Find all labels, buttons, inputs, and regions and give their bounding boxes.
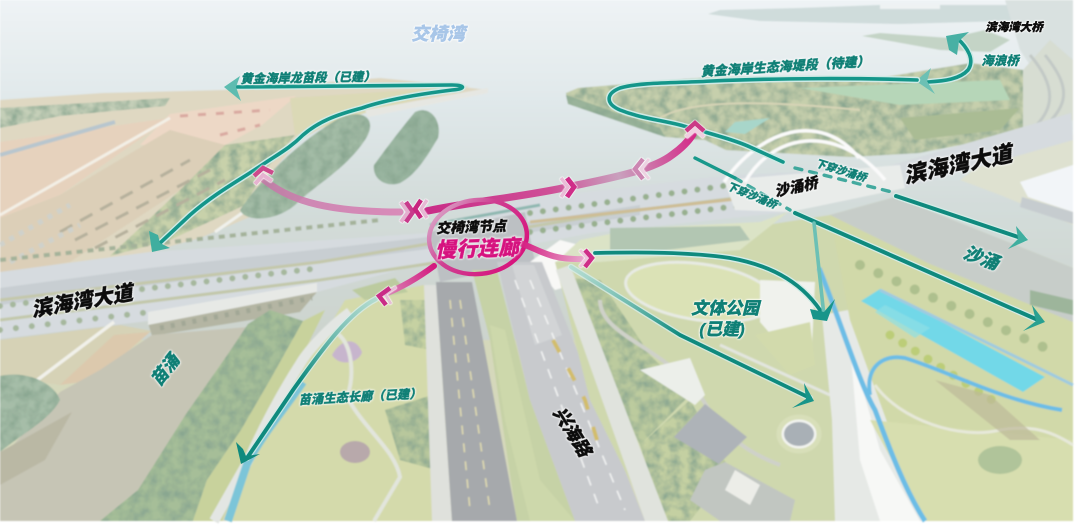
wide white road [822,310,925,521]
oval park [622,254,778,330]
teal arrow: lower Shachong underpass [695,158,1045,331]
river miaochong [0,327,248,521]
right lower lawn [830,197,1073,521]
Xinghai road median [472,270,575,521]
building [640,358,705,405]
chevron: south-west end [379,287,396,305]
river shachong [830,197,1073,322]
left bridge [148,283,317,325]
water of the bay [0,0,1073,340]
road sidewalk [424,285,452,521]
corridor: west curve [262,178,400,212]
chevron: east mid 2 [635,159,649,179]
label: golden coast eco seawall: 黄金海岸生态海堤段（待建） [700,54,870,79]
bridge shadow [148,292,317,336]
mangrove islands [240,114,370,218]
teal arrow: Miaochong eco corridor [236,299,376,464]
teal arrow: park diagonal [571,267,814,408]
label: cultural and sports park: (已建) [699,320,745,339]
magenta slow corridor network [254,123,704,305]
label: Shachong bridge: 沙涌桥 [773,174,822,200]
parking [674,404,747,464]
junction [430,212,535,282]
node ring [425,195,531,279]
teal arrow: Hailang bridge [916,32,971,94]
Xinghai road left carriageway [436,282,517,521]
round pond [779,417,819,451]
curved path [338,334,400,521]
label: underpass lower: 下穿沙涌桥 [725,180,780,212]
central green park [555,215,925,521]
lawn left of Xinghai road [228,285,436,521]
sports courts [861,289,1045,392]
label: underpass upper: 下穿沙涌桥 [814,157,869,185]
pier [365,88,488,117]
chevron: west end [254,168,273,184]
mangroves left [0,375,60,452]
white plaza [530,240,598,290]
chevron: mid east [561,178,574,197]
label: Shachong river: 沙涌 [961,242,1004,275]
Xinghai road right carriageway [497,262,645,521]
label: Miaochong eco corridor: 苗涌生态长廊（已建） [298,387,422,407]
chevron: north-east end [686,123,704,137]
chevrons: junction [401,200,427,222]
label: slow corridor: 慢行连廊 [435,235,523,262]
corridor: south-west branch [385,266,434,294]
right edge shoreline and road [1023,40,1073,140]
teal arrow: golden coast eco seawall and Shachong [609,79,1028,249]
main avenue band [0,113,1073,339]
teal arrow: golden coast Longmiao section [149,76,462,252]
grass strip [193,310,325,521]
teal arrow: cultural park curve [595,223,835,321]
label: golden coast Longmiao section: 黄金海岸龙苗段（已建） [240,70,376,86]
label: Xinghai road: 兴海路 [549,404,596,463]
corridor: east curve [427,134,693,211]
chevron: south-east end [580,250,592,267]
arch bridge [724,165,905,212]
plaza [760,280,815,345]
tree bank [100,310,303,521]
label: cultural and sports park [691,299,762,339]
sidewalk along road [556,265,668,521]
label: Binhai Bay avenue right: 滨海湾大道 [901,140,1018,188]
green patches near junction [352,278,408,300]
label: cultural and sports park: 文体公园 [691,299,762,318]
purple flower beds [332,341,362,362]
label: Binhai Bay avenue left: 滨海湾大道 [30,281,138,322]
label: Miaochong river: 苗涌 [147,349,185,390]
corridor: south-east branch [520,243,582,259]
tree rows by river [860,265,1050,350]
label: Hailang bridge: 海浪桥 [981,54,1020,68]
label: Binhai Bay bridge: 滨海湾大桥 [985,20,1044,34]
walkway [214,312,350,521]
blue paths [819,268,925,521]
left lower bank [0,325,152,385]
tree area beside road [570,278,690,445]
label: Jiaoyi Bay: 交椅湾 [411,24,468,44]
base ground [0,330,1073,521]
far shore top right [708,5,1040,24]
label: Jiaoyi Bay node: 交椅湾节点 [436,218,508,236]
right shore land [566,63,1050,157]
blue strip [228,382,303,521]
left shore land [0,78,488,282]
